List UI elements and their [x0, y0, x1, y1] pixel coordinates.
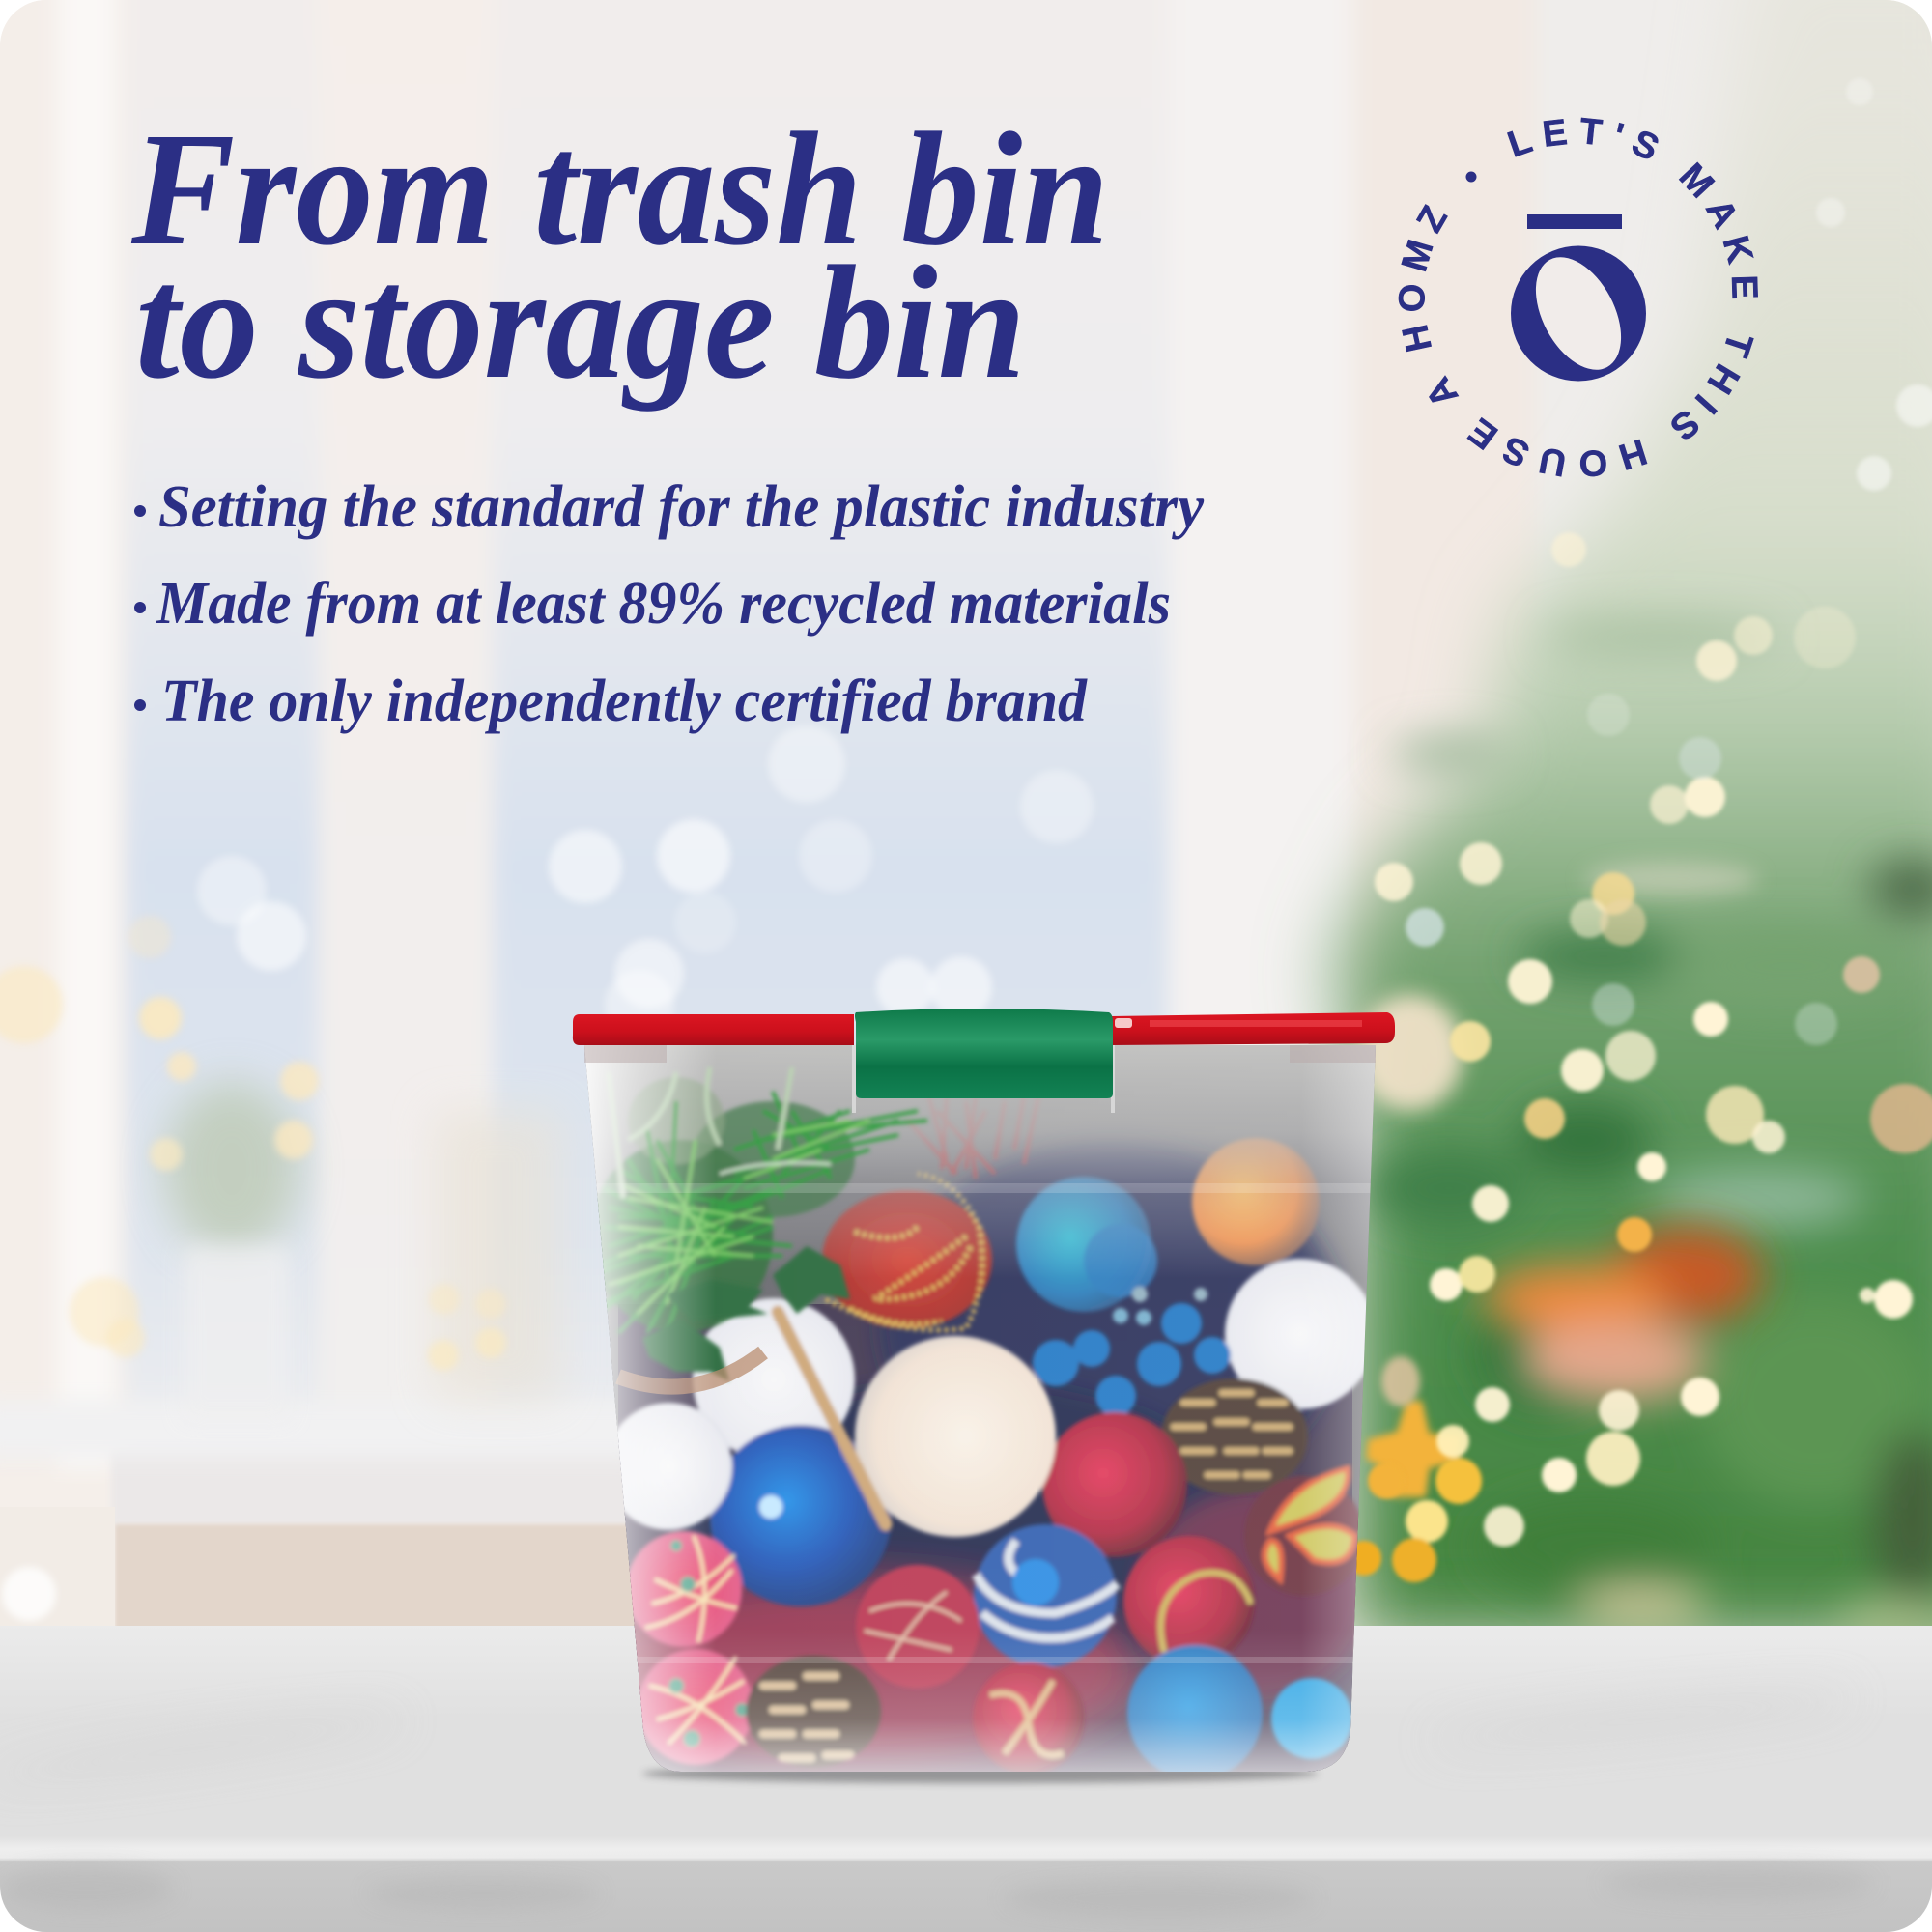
ornament: pink bauble bottom	[638, 1649, 753, 1765]
side frost	[580, 1043, 1381, 1777]
ornament: cream bauble	[855, 1336, 1056, 1537]
ornament: blue bottom bauble	[1127, 1645, 1263, 1780]
ornament: pine cone	[1161, 1378, 1308, 1494]
title: From trash bin	[130, 99, 1109, 279]
tree bokeh lights	[1347, 78, 1932, 1582]
lid red rim	[573, 1012, 1395, 1045]
ornament: red lace bauble	[856, 1565, 980, 1689]
holly leaves	[642, 1246, 850, 1381]
bin rim	[584, 1045, 1376, 1063]
star ornament	[1366, 1401, 1461, 1497]
title: to storage bin	[135, 233, 1026, 412]
ornament: white bauble back	[693, 1298, 855, 1461]
bullet: standard: Setting the standard for the plastic industry	[158, 474, 1204, 540]
logo badge	[1399, 118, 1758, 477]
bin contents	[560, 1043, 1381, 1780]
ornament: butterfly bauble	[1244, 1468, 1364, 1596]
logo dot	[1466, 172, 1476, 182]
bullet: certified: The only independently certified brand	[161, 668, 1088, 734]
bullet: recycled: Made from at least 89% recycled materials	[156, 571, 1171, 637]
logo mark	[1511, 214, 1646, 384]
ornament: blue bauble	[710, 1425, 892, 1606]
lid clip notch	[852, 1045, 1115, 1113]
cinnamon stick	[778, 1312, 886, 1524]
ornament: blue glitter cluster	[1033, 1287, 1231, 1416]
ornament: white bauble left	[605, 1403, 732, 1530]
ornament: teal bauble	[1016, 1177, 1151, 1312]
christmas tree background	[1333, 0, 1932, 1642]
frosted plastic overlay	[580, 1043, 1381, 1777]
ornament: red gold bauble	[1123, 1536, 1255, 1667]
ornament: right white bauble	[1225, 1259, 1376, 1409]
ornament: pink bauble	[626, 1531, 742, 1647]
ornament: pine cone bottom	[746, 1656, 881, 1768]
bin shadow	[642, 1764, 1319, 1783]
red tinsel	[908, 1092, 1038, 1179]
bokeh lights in window	[0, 725, 1094, 1621]
lid green clip	[855, 1009, 1113, 1098]
bullet list	[134, 474, 1204, 734]
ornament: red bauble bottom	[973, 1662, 1085, 1775]
storage bin with ornaments	[560, 1009, 1395, 1780]
logo ring text: LET'S MAKE THIS HOUSE A HOMZ	[1399, 118, 1758, 477]
ornament: red bauble	[1042, 1412, 1187, 1557]
ornament: silver blue bauble	[974, 1524, 1118, 1667]
pine branch	[589, 1067, 927, 1333]
marble counter	[0, 1626, 1932, 1932]
ornament: orange bauble	[1192, 1138, 1320, 1265]
garland ring	[618, 1352, 763, 1387]
orange tree ornament	[1483, 1227, 1763, 1403]
ornament: light blue bauble	[1271, 1678, 1352, 1759]
ornament: red bauble with gold beads	[822, 1174, 992, 1330]
